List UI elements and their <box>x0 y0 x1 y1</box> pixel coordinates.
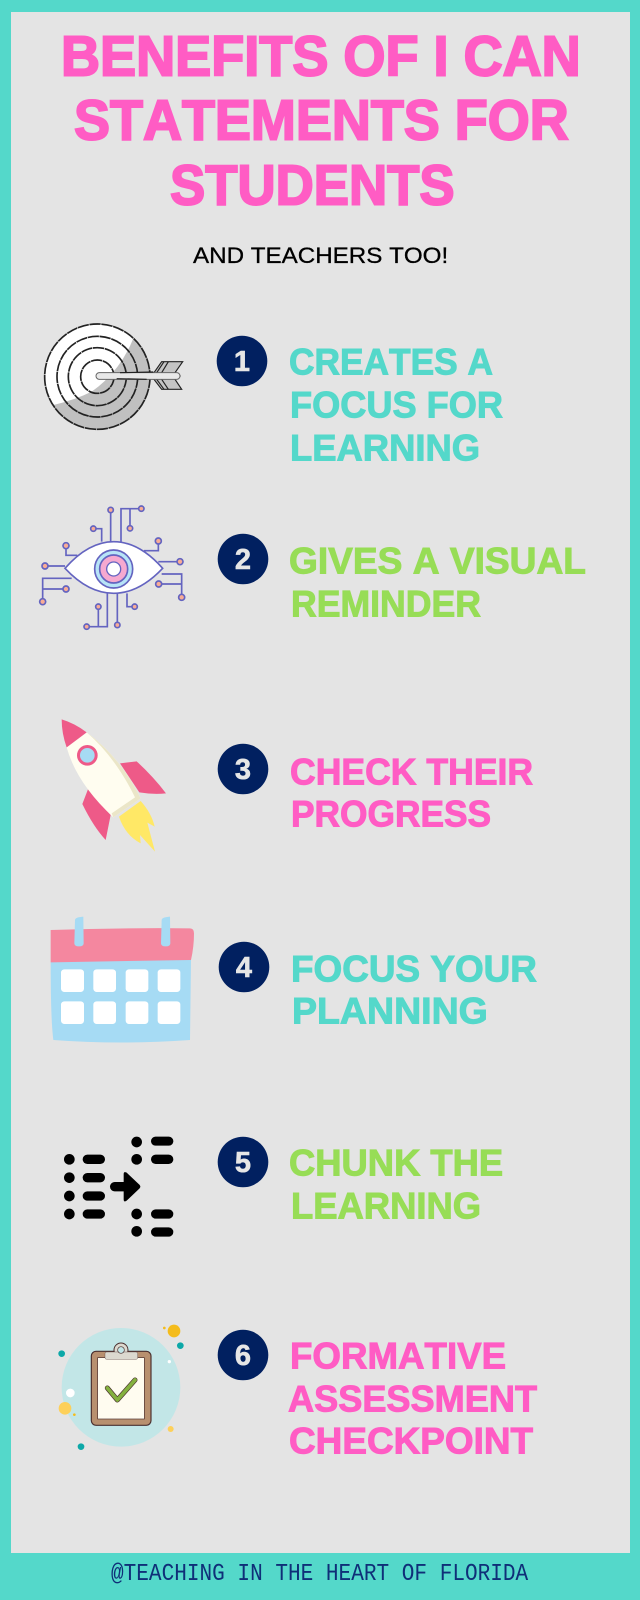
heading: creates a focus for learning: CREATES A <box>289 341 493 383</box>
icon: target with arrow <box>45 324 183 433</box>
heading: gives a visual reminder: REMINDER <box>291 583 481 625</box>
number badge 1: 1 <box>234 346 250 378</box>
heading: focus your planning <box>291 947 537 1032</box>
icon: circuit eye <box>40 506 185 629</box>
number badge 3: 3 <box>235 754 251 786</box>
number badge 3 <box>218 744 268 794</box>
title <box>61 24 581 217</box>
icon: rocket <box>62 719 166 852</box>
number badge 6 <box>218 1330 268 1380</box>
number badge 4: 4 <box>236 952 252 984</box>
heading: focus your planning: FOCUS YOUR <box>291 947 537 990</box>
number badge 4 <box>219 942 269 992</box>
number badge 5: 5 <box>235 1147 251 1179</box>
title: STUDENTS <box>170 153 455 217</box>
heading: chunk the learning <box>289 1142 503 1227</box>
subtitle: AND TEACHERS TOO! <box>193 243 448 268</box>
number badge 2: 2 <box>235 544 251 576</box>
heading: chunk the learning: LEARNING <box>291 1185 481 1227</box>
heading: chunk the learning: CHUNK THE <box>289 1142 503 1184</box>
heading: check their progress: CHECK THEIR <box>290 751 533 793</box>
heading: creates a focus for learning: FOCUS FOR <box>290 384 503 426</box>
heading: creates a focus for learning: LEARNING <box>290 427 480 469</box>
icon: chunking list <box>64 1137 173 1237</box>
number badge 6: 6 <box>235 1340 251 1372</box>
icon: clipboard with checkmark <box>58 1325 184 1450</box>
heading: check their progress <box>290 751 533 835</box>
title: STATEMENTS FOR <box>74 88 569 152</box>
heading: gives a visual reminder <box>289 539 586 625</box>
heading: formative assessment checkpoint: CHECKPOINT <box>289 1419 533 1462</box>
heading: formative assessment checkpoint <box>288 1334 538 1462</box>
heading: creates a focus for learning <box>289 341 503 469</box>
heading: formative assessment checkpoint: ASSESSMENT <box>288 1378 538 1420</box>
heading: gives a visual reminder: GIVES A VISUAL <box>289 539 586 582</box>
icon: calendar <box>51 917 194 1042</box>
footer credit: @TEACHING IN THE HEART OF FLORIDA <box>111 1560 529 1587</box>
number badge 1 <box>217 336 267 386</box>
heading: check their progress: PROGRESS <box>291 793 491 835</box>
number badge 2 <box>218 534 268 584</box>
heading: focus your planning: PLANNING <box>292 990 488 1032</box>
number badge 5 <box>218 1137 268 1187</box>
heading: formative assessment checkpoint: FORMATIVE <box>290 1334 506 1377</box>
title: BENEFITS OF I CAN <box>61 24 581 88</box>
